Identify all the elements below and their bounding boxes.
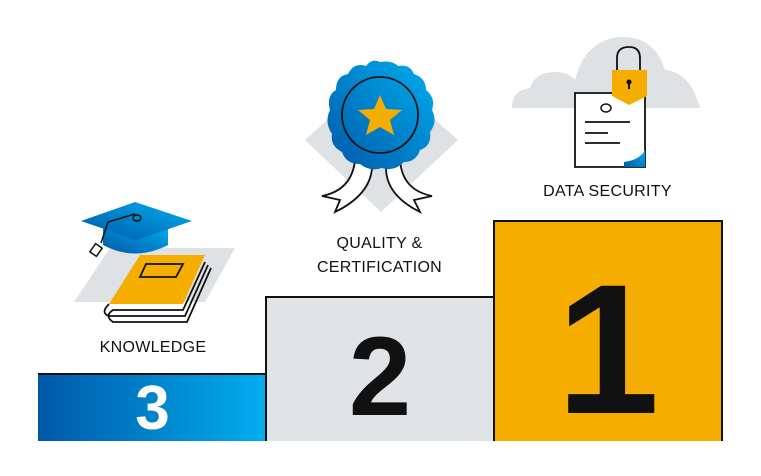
icon: cloud document lock — [512, 37, 700, 167]
label: quality & certification: QUALITY & — [336, 235, 422, 252]
label: data security: DATA SECURITY — [543, 183, 672, 200]
icon: graduation cap and book — [74, 202, 235, 322]
podium 1: 1 — [557, 246, 659, 452]
label: quality & certification: CERTIFICATION — [317, 259, 442, 276]
label: quality & certification — [317, 235, 442, 276]
podium 2: 2 — [349, 314, 411, 439]
podium 2 — [265, 296, 495, 441]
podium 1 — [493, 220, 723, 441]
podium 3 — [38, 373, 267, 441]
podium 3: 3 — [135, 374, 170, 442]
label: knowledge: KNOWLEDGE — [100, 339, 206, 356]
icon: award rosette — [305, 61, 458, 212]
